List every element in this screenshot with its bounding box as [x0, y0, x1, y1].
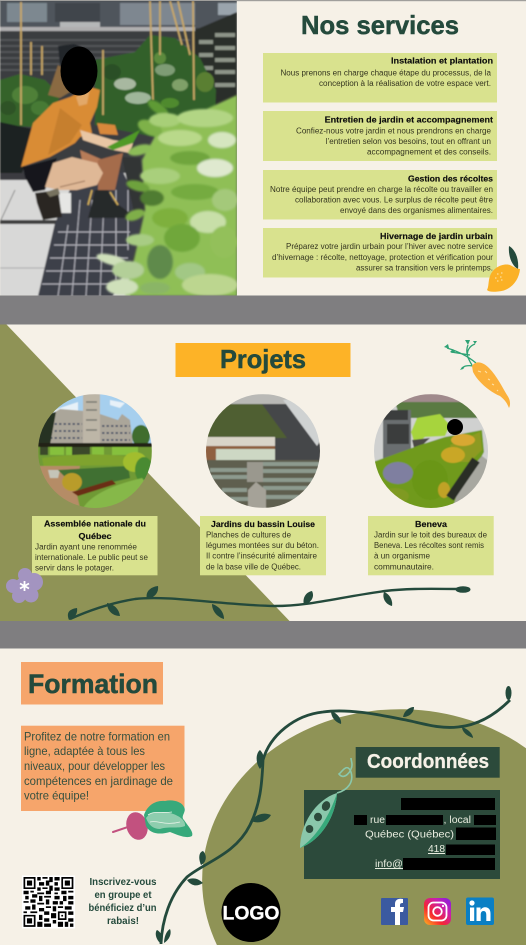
icon: carrot — [444, 340, 510, 408]
project photo: Jardins du bassin Louise — [205, 394, 322, 508]
heading: Projets — [176, 343, 350, 377]
top edge — [0, 0, 526, 1]
service: Instalation et plantation — [263, 53, 497, 102]
text block: formation description: Profitez de notre formation en — [24, 731, 170, 744]
logo — [222, 883, 280, 942]
section: Projets — [0, 324, 510, 621]
icon: beet — [113, 800, 192, 842]
band: grey divider — [0, 296, 526, 324]
service: Gestion des récoltes — [263, 170, 497, 220]
service: Instalation et plantation: Nous prenons en charge chaque étape du processus, de la — [280, 68, 492, 78]
project photo: Beneva — [373, 394, 490, 510]
caption: Jardins du bassin Louise: Il contre l’insécurité alimentaire — [206, 552, 318, 561]
text block: group discount: Inscrivez-vous — [90, 877, 157, 888]
service: Entretien de jardin et accompagnement: l’entretien selon vos besoins, tout en offrant un — [326, 137, 491, 146]
caption: Assemblée nationale du Québec: Québec — [78, 531, 112, 541]
text block: group discount — [88, 877, 157, 927]
panel: contact details: , local — [444, 815, 471, 826]
text block: formation description: votre équipe! — [24, 790, 89, 802]
text block: formation description: ligne, adaptée à tous les — [24, 745, 145, 758]
redaction: face — [60, 46, 98, 96]
decoration: long vine — [156, 686, 512, 944]
caption: Beneva: Jardin sur le toit des bureaux de — [374, 530, 488, 539]
QR code — [22, 876, 75, 928]
section: Nos services — [0, 0, 520, 296]
caption: Jardins du bassin Louise: légumes montées sur du béton. — [206, 541, 319, 550]
background: olive ellipse — [202, 709, 526, 945]
logo: LOGO — [222, 904, 280, 924]
caption: Beneva: Beneva. Les récoltes sont remis — [374, 541, 484, 550]
project photo: Assemblée nationale — [38, 394, 153, 510]
caption: Assemblée nationale du Québec: Assemblée nationale du — [44, 519, 146, 529]
caption: Assemblée nationale du Québec — [32, 516, 158, 575]
service: Hivernage de jardin urbain: d’hivernage : récolte, nettoyage, protection et vérification pour — [272, 253, 493, 262]
service: Entretien de jardin et accompagnement: Entretien de jardin et accompagnement — [325, 114, 493, 124]
caption: Assemblée nationale du Québec: servir dans le potager. — [35, 564, 114, 573]
redaction: face — [447, 419, 463, 435]
heading: Nos services: Nos services — [301, 10, 459, 40]
background: olive triangle — [0, 324, 290, 621]
panel: contact details: rue — [370, 815, 385, 826]
caption: Jardins du bassin Louise: Jardins du bassin Louise — [211, 519, 315, 529]
service: Gestion des récoltes: Gestion des récoltes — [408, 174, 493, 184]
service: Hivernage de jardin urbain: Préparez votre jardin urbain pour l’hiver avec notre service — [286, 242, 494, 251]
caption: Assemblée nationale du Québec: Jardin ayant une renommée — [35, 542, 138, 551]
service: Gestion des récoltes: collaboration avec vous. Le surplus de récolte peut être — [295, 196, 494, 204]
text block: group discount: rabais! — [107, 916, 139, 927]
caption: Beneva: Beneva — [415, 519, 447, 529]
service: Entretien de jardin et accompagnement: accompagnement et des conseils. — [367, 148, 491, 157]
service: Hivernage de jardin urbain: assurer sa transition vers le printemps. — [356, 263, 493, 272]
caption: Beneva — [368, 516, 494, 575]
caption: Jardins du bassin Louise: Planches de cultures de — [206, 530, 292, 539]
panel: contact details: Québec (Québec) — [365, 830, 454, 840]
service: Hivernage de jardin urbain — [263, 228, 497, 278]
caption: Jardins du bassin Louise — [200, 516, 326, 575]
service: Entretien de jardin et accompagnement — [263, 111, 497, 161]
heading: Formation: Formation — [28, 669, 158, 699]
service: Entretien de jardin et accompagnement: Confiez-nous votre jardin et nous prendrons en charge — [296, 126, 492, 136]
heading: Projets: Projets — [220, 344, 306, 374]
text block: formation description: niveaux, pour développer les — [24, 760, 165, 773]
service: Gestion des récoltes: Notre équipe peut prendre en charge la récolte ou travailler en — [270, 185, 493, 194]
icon: pea pod — [300, 758, 352, 848]
service: Instalation et plantation: Instalation et plantation — [391, 56, 493, 66]
caption: Jardins du bassin Louise: de la base ville de Québec. — [206, 562, 301, 571]
heading: Coordonnées: Coordonnées — [367, 751, 489, 773]
icon: purple flower — [6, 568, 43, 603]
text block: formation description: compétences en jardinage de — [24, 775, 173, 788]
text block: group discount: bénéficiez d’un — [88, 903, 156, 914]
band: grey divider — [0, 621, 526, 648]
icon: LinkedIn — [466, 898, 494, 925]
panel: contact details — [304, 790, 500, 879]
icon: Facebook — [381, 898, 408, 925]
icon: Instagram — [424, 898, 451, 925]
text block: formation description — [21, 726, 184, 811]
panel: contact details: 418 — [428, 844, 445, 855]
heading: Formation — [21, 662, 163, 704]
heading: Coordonnées — [356, 747, 500, 778]
foreground foliage — [95, 95, 238, 296]
caption: Beneva: à un organisme — [374, 552, 431, 561]
caption: Beneva: communautaire. — [374, 562, 434, 571]
text block: group discount: en groupe et — [94, 890, 152, 901]
service: Gestion des récoltes: envoyé dans des organismes alimentaires. — [340, 206, 493, 215]
section: Formation — [21, 662, 526, 945]
icon: lemon — [487, 246, 520, 292]
panel: contact details: info@ — [375, 859, 403, 870]
photo: gardener on a rooftop garden — [0, 0, 238, 296]
decoration: vine — [68, 586, 471, 620]
service: Instalation et plantation: conception à la réalisation de votre espace vert. — [319, 79, 491, 88]
caption: Assemblée nationale du Québec: internationale. Le public peut se — [35, 553, 149, 562]
service: Hivernage de jardin urbain: Hivernage de jardin urbain — [380, 231, 493, 241]
